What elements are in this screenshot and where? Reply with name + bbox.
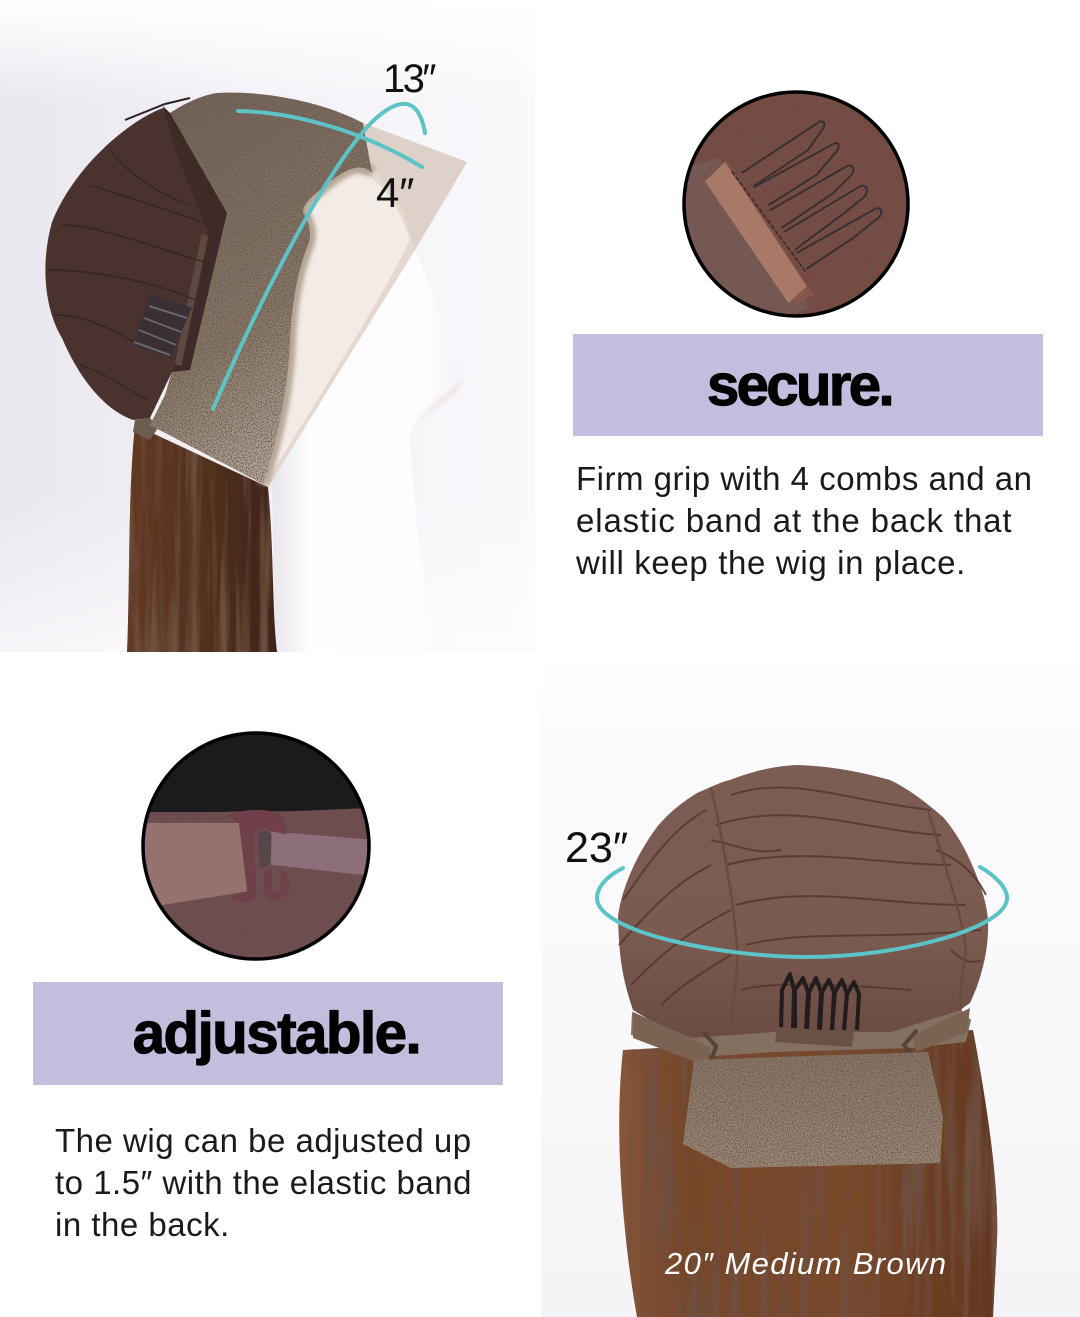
comb bbox=[781, 974, 859, 1030]
label: 4 inch: 4″ bbox=[376, 169, 414, 216]
text: secure description bbox=[576, 460, 1033, 581]
cap bbox=[45, 98, 227, 420]
heading band: secure bbox=[573, 334, 1043, 436]
caption: 20″ Medium Brown bbox=[664, 1246, 947, 1281]
comb base bbox=[775, 1027, 854, 1047]
photo: wig cap back view bbox=[541, 765, 1080, 1317]
measure loop bbox=[597, 867, 1007, 957]
cap tab bbox=[133, 418, 158, 440]
heading band: adjustable: adjustable. bbox=[133, 1001, 420, 1066]
text: secure description: Firm grip with 4 combs and an bbox=[576, 460, 1033, 497]
photo: adjustable strap circle bbox=[141, 731, 371, 961]
text: secure description: will keep the wig in place. bbox=[576, 544, 966, 581]
text: adjustable description: The wig can be adjusted up bbox=[55, 1122, 472, 1159]
label: 13 inch: 13″ bbox=[383, 57, 436, 101]
heading band: adjustable bbox=[33, 982, 503, 1085]
elastic strap bbox=[631, 1008, 971, 1066]
lace patch bbox=[683, 1052, 943, 1168]
mannequin bbox=[272, 240, 462, 652]
label: 23 inch: 23″ bbox=[565, 824, 628, 872]
text: adjustable description: in the back. bbox=[55, 1206, 230, 1243]
cap bbox=[618, 765, 988, 1045]
text: adjustable description: to 1.5″ with the elastic band bbox=[55, 1164, 472, 1201]
lace front bbox=[150, 93, 467, 487]
photo: front lace wig side view bbox=[0, 34, 492, 652]
text: secure description: elastic band at the back that bbox=[576, 502, 1012, 539]
heading band: secure: secure. bbox=[707, 352, 892, 418]
hair bbox=[619, 1030, 997, 1317]
hair bbox=[127, 425, 277, 652]
measure arcs bbox=[213, 104, 425, 409]
photo: comb detail circle bbox=[682, 90, 910, 318]
text: adjustable description bbox=[55, 1122, 472, 1243]
